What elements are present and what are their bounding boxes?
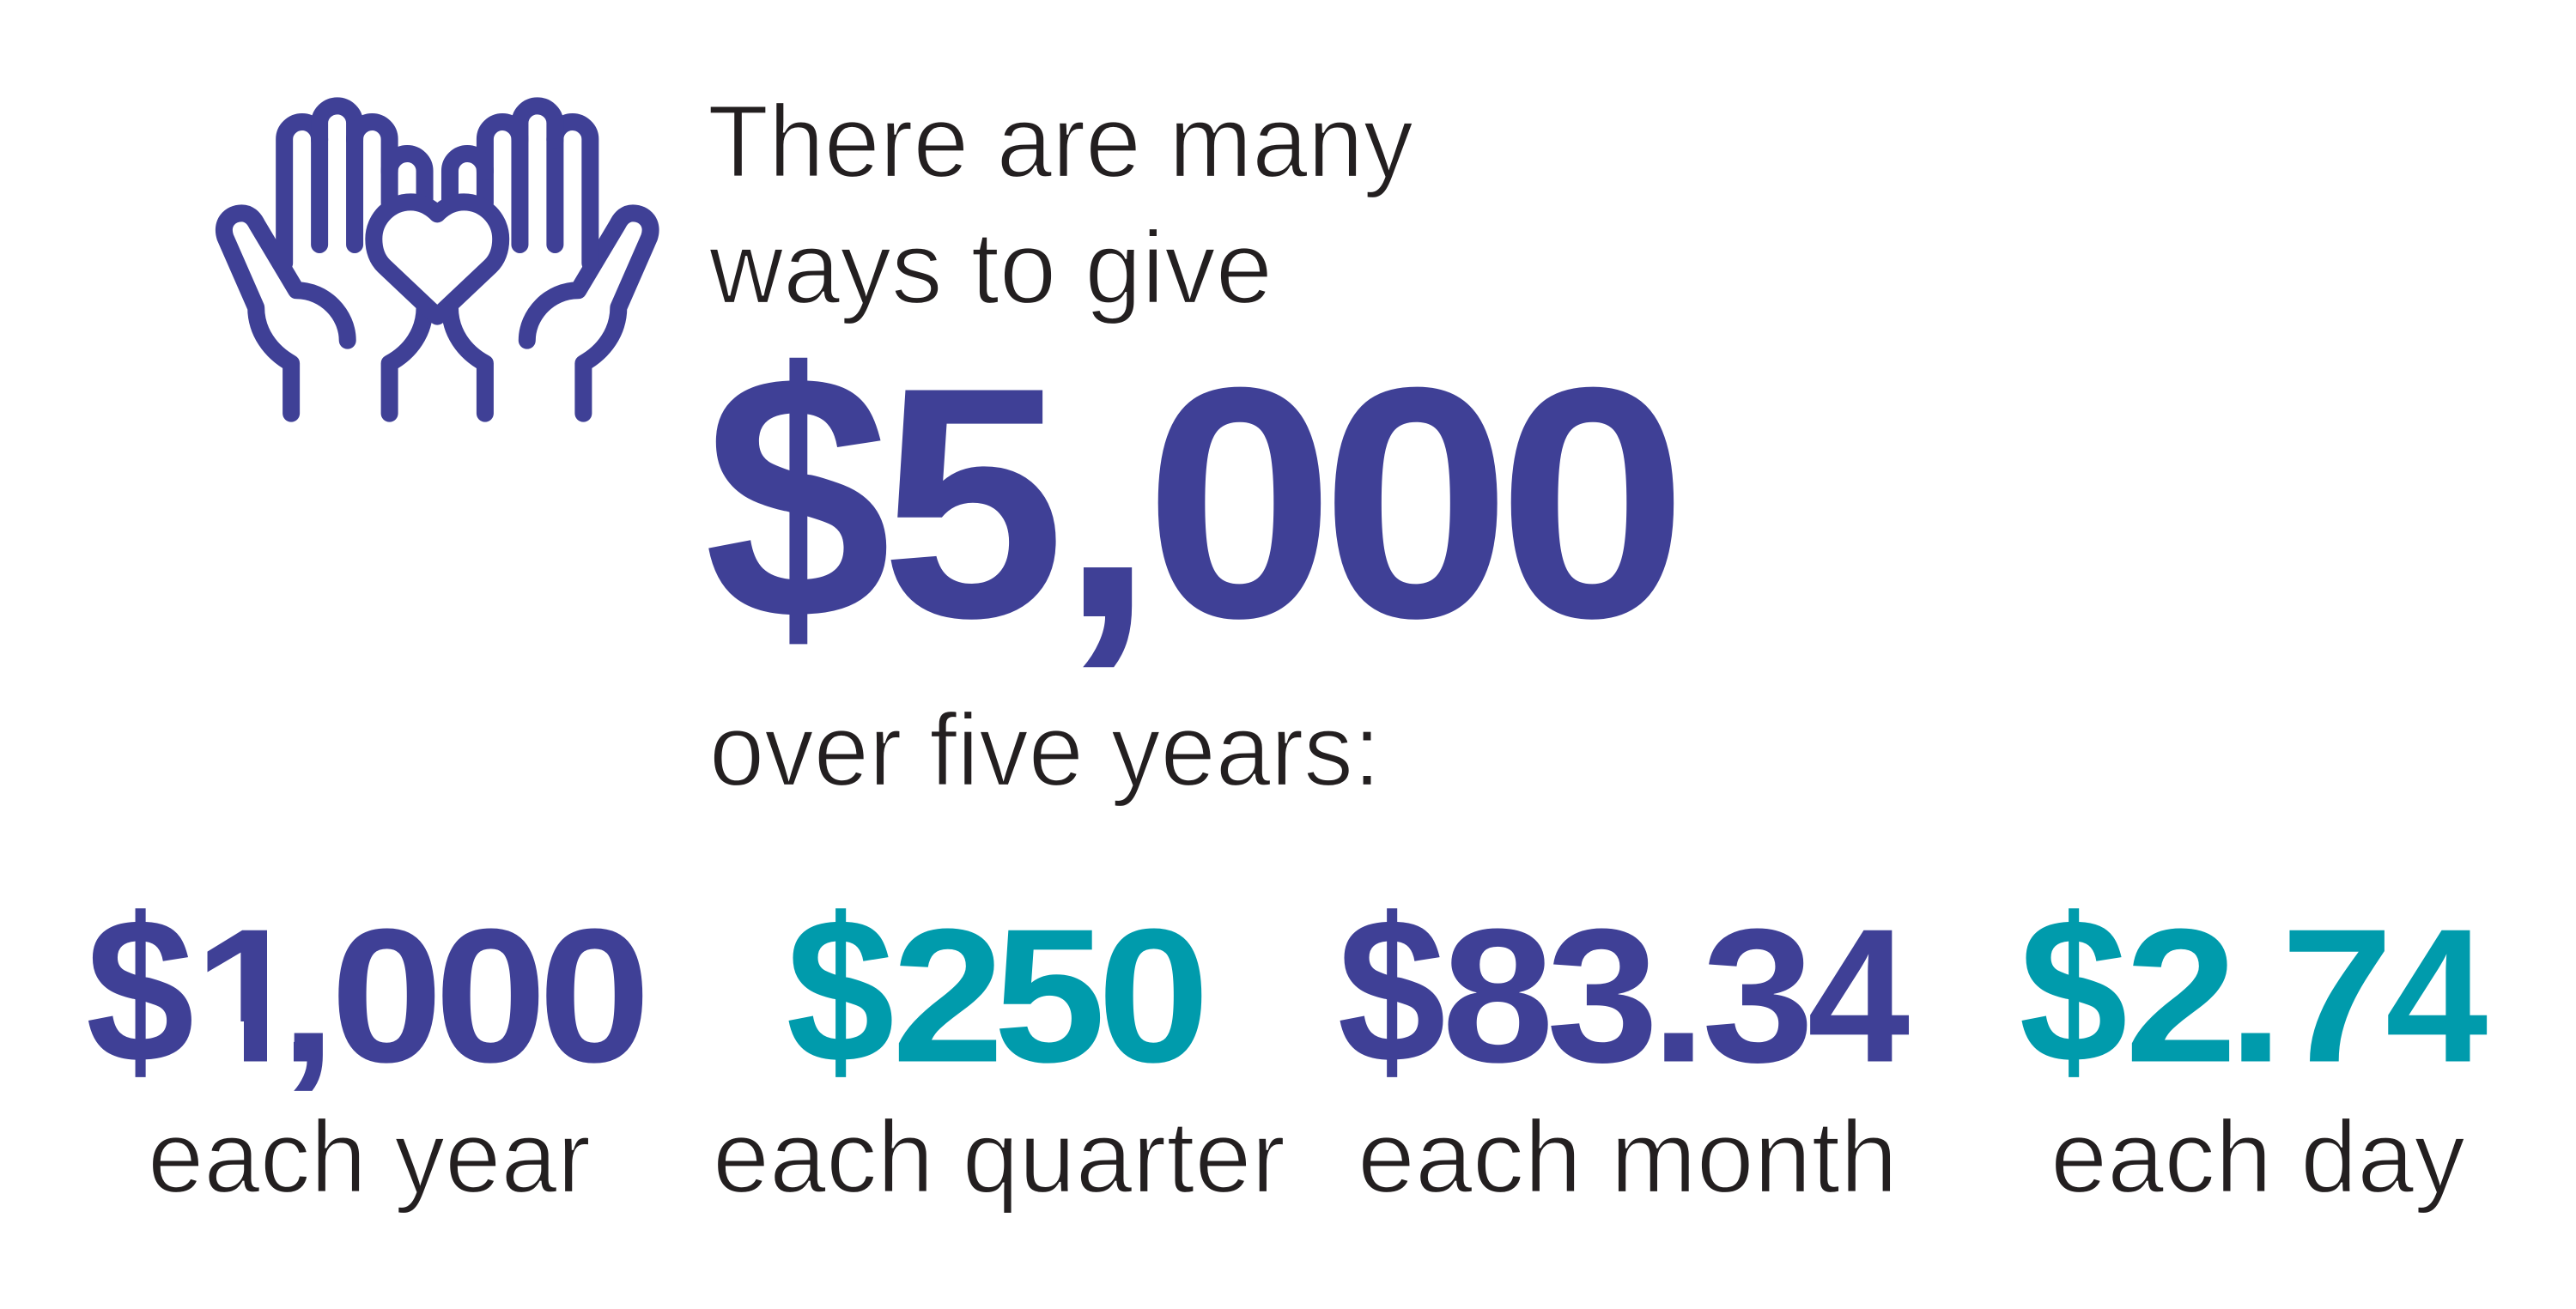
- amount: each day: [2020, 875, 2488, 1215]
- amount: each month: 83.3: [1442, 890, 1814, 1102]
- headline amount: 5: [881, 319, 1065, 687]
- label: each month: each month: [1358, 1100, 1898, 1215]
- heading: over five years: over five years:: [709, 693, 1381, 808]
- heading: intro line two: ways to give: [708, 210, 1273, 325]
- heading: intro line one: There are many: [708, 84, 1413, 199]
- amount: each month: $: [1338, 875, 1446, 1106]
- amount: each year: ,000: [280, 890, 651, 1102]
- amount: each year: $: [86, 875, 194, 1106]
- icon: open hands holding a heart: [224, 106, 651, 414]
- headline amount: ,000: [1060, 318, 1688, 686]
- amount: each day: $: [2020, 875, 2128, 1106]
- amount: each month: [1338, 875, 1910, 1215]
- amount: each day: 4: [2385, 889, 2488, 1102]
- label: each quarter: each quarter: [713, 1100, 1285, 1215]
- amount: each year: [86, 875, 651, 1215]
- amount: each quarter: 250: [892, 890, 1210, 1102]
- amount: each quarter: [713, 875, 1285, 1215]
- amount: each day: 2.7: [2125, 890, 2393, 1102]
- amount: each year: 1: [193, 890, 306, 1102]
- label: each day: each day: [2050, 1100, 2465, 1215]
- amount: each month: 4: [1807, 889, 1910, 1102]
- headline amount: [704, 300, 1688, 693]
- headline amount: $: [704, 300, 891, 693]
- label: each year: each year: [148, 1100, 591, 1215]
- amount: each quarter: $: [787, 875, 895, 1106]
